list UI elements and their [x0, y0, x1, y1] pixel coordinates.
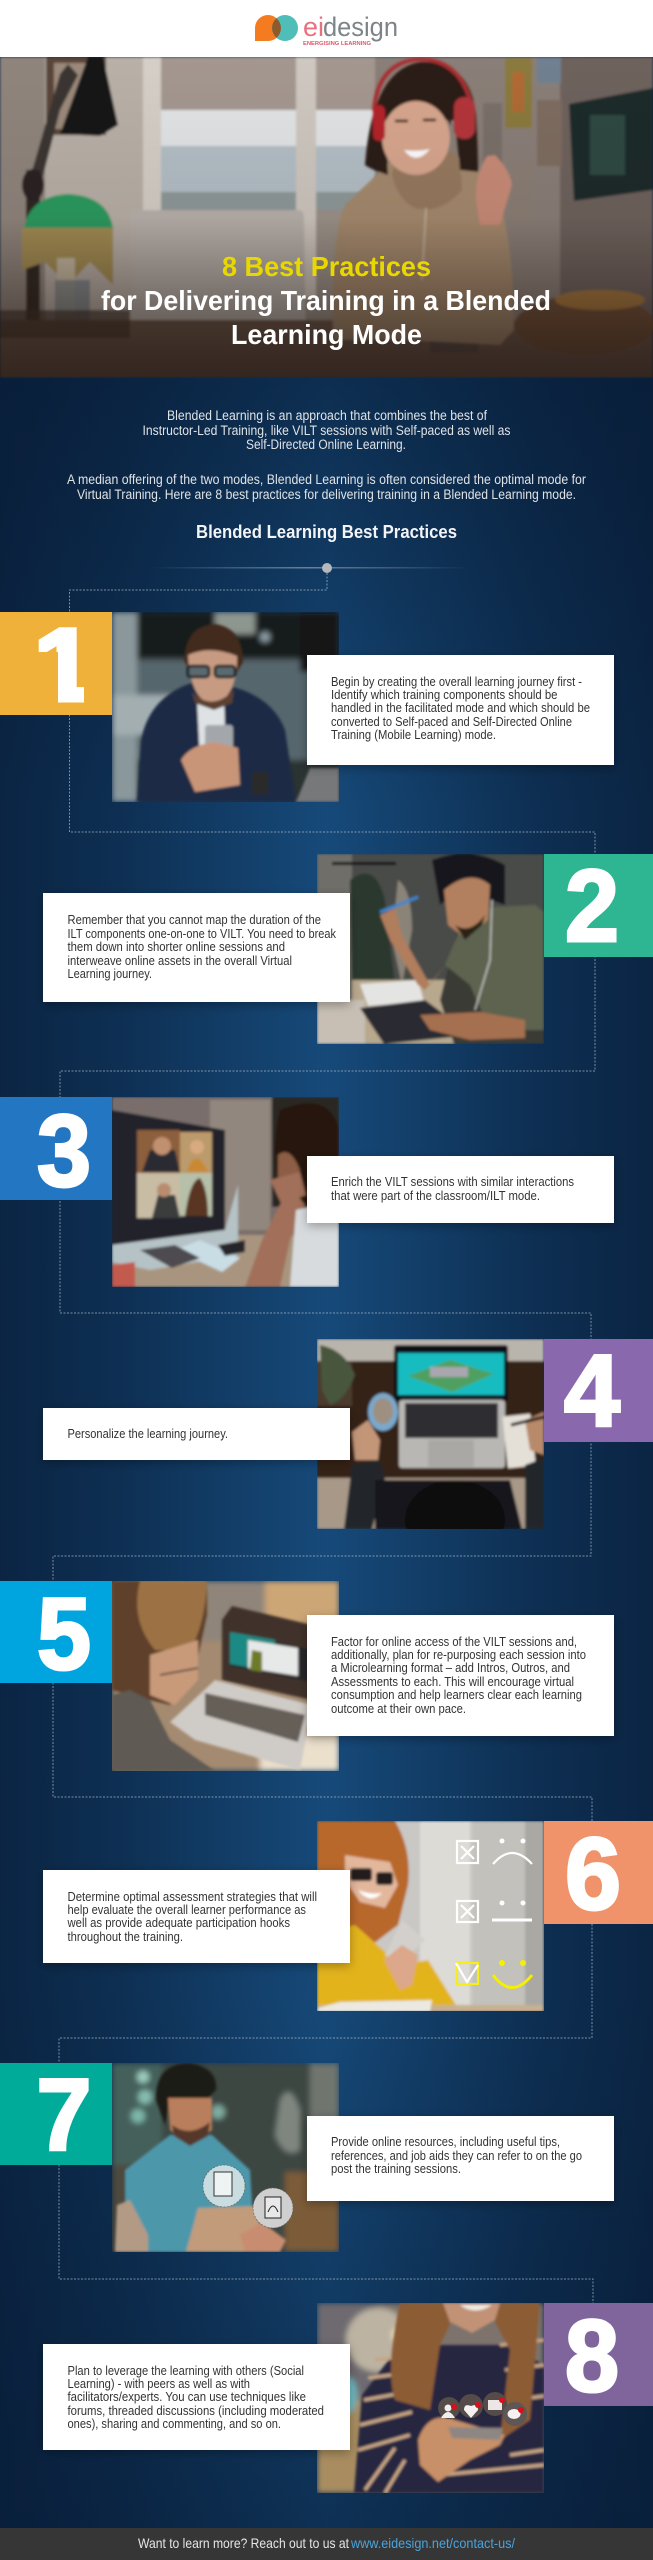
number 6: 6 — [565, 1817, 621, 1931]
text box 8: Plan to leverage the learning with others (Social — [68, 2363, 304, 2378]
title: for Delivering Training in a Blended — [101, 285, 551, 316]
text box 8: facilitators/experts. You can use techniques like — [68, 2389, 306, 2404]
step 3 — [0, 1094, 614, 1287]
number box 8 — [544, 2303, 653, 2406]
photo: woman on video call — [112, 1097, 339, 1287]
text box 7 — [307, 2116, 614, 2201]
icons: checkbox and face ratings — [456, 1838, 532, 1988]
number box 3 — [0, 1097, 112, 1200]
text box 6: Determine optimal assessment strategies that will — [68, 1889, 317, 1904]
intro text: A median offering of the two modes, Blended Learning is often considered the optimal mode for — [67, 472, 586, 487]
text box 1: Identify which training components should be — [331, 687, 558, 702]
text box 4: Personalize the learning journey. — [68, 1426, 228, 1441]
text box 2: Remember that you cannot map the duration of the — [68, 912, 321, 927]
number box 4 — [544, 1339, 653, 1442]
icons: social notifications — [438, 2392, 527, 2426]
section heading: Blended Learning Best Practices — [196, 522, 457, 542]
photo: overhead laptop on desk — [317, 1339, 544, 1529]
text box 1: handled in the facilitated mode and which should be — [331, 700, 590, 715]
number 3: 3 — [37, 1094, 91, 1208]
text box 8: ones), sharing and commenting, and so on. — [68, 2416, 281, 2431]
step 2 — [43, 849, 653, 1044]
number 5: 5 — [37, 1577, 91, 1691]
text box 7: Provide online resources, including useful tips, — [331, 2134, 560, 2149]
number 2: 2 — [565, 849, 619, 963]
logo: eidesign: ENERGISING LEARNING — [303, 41, 371, 47]
footer bar: www.eidesign.net/contact-us/ — [350, 2535, 515, 2551]
number 4: 4 — [564, 1334, 620, 1448]
number box 1 — [0, 612, 112, 715]
text box 8: Learning) - with peers as well as with — [68, 2376, 250, 2391]
intro text: Virtual Training. Here are 8 best practices for delivering training in a Blended Learning mode. — [77, 487, 576, 502]
step 6 — [43, 1817, 653, 2012]
number box 7 — [0, 2063, 112, 2165]
footer bar — [0, 2528, 653, 2560]
text box 5: additionally, plan for re-purposing each session into — [331, 1647, 586, 1662]
number box 2 — [544, 854, 653, 957]
step 8 — [43, 2299, 653, 2493]
photo: woman with phone and feedback icons — [317, 1821, 544, 2011]
text box 6: help evaluate the overall learner performance as — [68, 1902, 306, 1917]
photo: man watching microlearning on laptop — [112, 1581, 339, 1771]
photo: smiling man with tablet and resource icons — [112, 2063, 339, 2252]
text box 8 — [43, 2344, 350, 2450]
text box 3 — [307, 1156, 614, 1223]
text box 5: Factor for online access of the VILT sessions and, — [331, 1634, 577, 1649]
text box 1: Training (Mobile Learning) mode. — [331, 727, 496, 742]
photo: woman using phone with social icons — [317, 2303, 544, 2493]
photo: man with glasses looking at phone — [112, 612, 339, 802]
hero photo: woman with headphones at laptop — [0, 57, 653, 378]
text box 2: ILT components one-on-one to VILT. You need to break — [68, 926, 336, 941]
text box 5 — [307, 1615, 614, 1736]
step 1 — [0, 608, 614, 802]
text box 2: them down into shorter online sessions and — [68, 939, 285, 954]
text box 6 — [43, 1870, 350, 1963]
dashed connector path — [53, 573, 595, 2303]
text box 5: Assessments to each. This will encourage virtual — [331, 1674, 574, 1689]
text box 2: interweave online assets in the overall Virtual — [68, 953, 292, 968]
number box 6 — [544, 1821, 653, 1924]
logo: eidesign — [255, 12, 398, 47]
text box 5: consumption and help learners clear each learning — [331, 1687, 582, 1702]
number 8: 8 — [565, 2299, 619, 2413]
logo: eidesign: ei — [303, 12, 324, 42]
number 7: 7 — [36, 2058, 92, 2172]
text box 7: references, and job aids they can refer to on the go — [331, 2148, 582, 2163]
title: Learning Mode — [231, 319, 422, 350]
text box 8: forums, threaded discussions (including moderated — [68, 2403, 324, 2418]
photo: man writing at laptop — [317, 854, 544, 1044]
header bar — [0, 0, 653, 57]
text box 3: Enrich the VILT sessions with similar interactions — [331, 1174, 574, 1189]
step 5 — [0, 1577, 614, 1771]
logo: eidesign: design — [323, 12, 398, 42]
text box 1: converted to Self-paced and Self-Directed Online — [331, 714, 572, 729]
intro text: Instructor-Led Training, like VILT sessions with Self-paced as well as — [142, 423, 511, 438]
text box 5: a Microlearning format – add Intros, Outros, and — [331, 1660, 570, 1675]
icons: document and PDF badges — [203, 2165, 293, 2228]
text box 2 — [43, 893, 350, 1002]
text box 5: outcome at their own pace. — [331, 1701, 466, 1716]
title: 8 Best Practices — [222, 251, 431, 282]
text box 3: that were part of the classroom/ILT mode. — [331, 1188, 540, 1203]
step 4 — [43, 1334, 653, 1560]
intro text — [67, 408, 586, 502]
text box 2: Learning journey. — [68, 966, 152, 981]
text box 6: well as provide adequate participation hooks — [67, 1915, 290, 1930]
text box 6: throughout the training. — [68, 1929, 183, 1944]
intro text: Self-Directed Online Learning. — [246, 437, 406, 452]
number 1: 1 — [34, 608, 94, 722]
text box 4 — [43, 1408, 350, 1460]
step 7 — [0, 2058, 614, 2252]
title — [101, 251, 551, 350]
text box 7: post the training sessions. — [331, 2161, 461, 2176]
text box 1: Begin by creating the overall learning journey first - — [331, 674, 582, 689]
text box 1 — [307, 655, 614, 765]
divider line with dot — [150, 563, 470, 573]
footer bar: Want to learn more? Reach out to us at — [138, 2535, 349, 2551]
number box 5 — [0, 1581, 112, 1683]
intro text: Blended Learning is an approach that combines the best of — [167, 408, 487, 423]
